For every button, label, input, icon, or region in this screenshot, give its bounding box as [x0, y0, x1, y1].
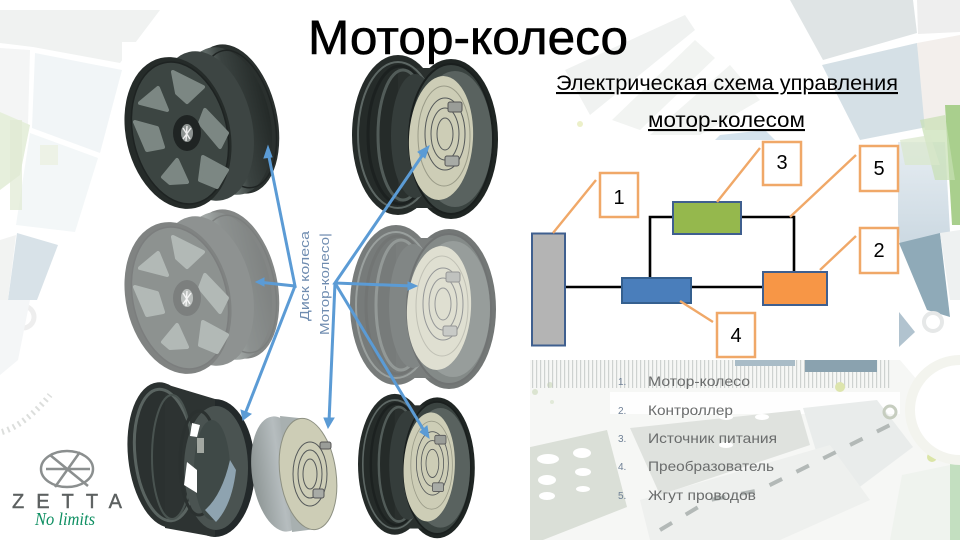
panel: white wheels area	[122, 42, 530, 540]
wheel: motor wheel transparent	[350, 225, 496, 389]
legend list: Источник питания	[648, 430, 777, 446]
wheel: motor wheel bottom right	[358, 394, 475, 538]
heading: circuit diagram: мотор-колесом	[648, 109, 805, 132]
heading: circuit diagram	[556, 72, 898, 132]
vertical label: disc: Диск колеса	[297, 230, 312, 321]
vertical label: motor wheel: Мотор-колесо|	[317, 233, 332, 335]
legend list: 4.	[618, 462, 626, 473]
legend list: Жгут проводов	[648, 487, 756, 503]
callout 2	[860, 228, 898, 273]
legend list: 1.	[618, 377, 626, 388]
legend list	[618, 373, 777, 503]
circuit wires	[565, 217, 794, 287]
callout 3: 3	[776, 152, 788, 174]
title: Мотор-колесо	[308, 12, 628, 65]
callout 1	[600, 173, 638, 217]
logo: ZETTA emblem	[41, 451, 93, 487]
wheel: alloy disc dark	[110, 35, 293, 220]
arrows: disc callouts	[241, 146, 295, 420]
callout 5: 5	[873, 158, 885, 180]
heading: circuit diagram: Электрическая схема управления	[556, 72, 898, 95]
block: power source	[673, 202, 741, 234]
wheel: hollow rim bottom	[121, 379, 255, 537]
logo: tagline: No limits	[34, 509, 95, 529]
legend list: Преобразователь	[648, 458, 774, 474]
panel: white circuit area	[530, 140, 898, 360]
legend list: Контроллер	[648, 402, 733, 418]
legend list: 2.	[618, 406, 626, 417]
wheel: assembled motor wheel	[352, 55, 498, 219]
circuit diagram	[532, 142, 898, 357]
callout 4: 4	[730, 325, 742, 347]
wheel: motor unit	[244, 413, 344, 535]
block: motor wheel	[532, 234, 565, 346]
legend list: 5.	[618, 491, 626, 502]
callout 4	[717, 313, 755, 357]
callout 5	[860, 146, 898, 191]
callout 2: 2	[873, 240, 885, 262]
callout 3	[763, 142, 801, 185]
callout 1: 1	[613, 187, 625, 209]
block: controller	[763, 272, 827, 305]
logo: ZETTA wordmark: ZETTA	[12, 491, 123, 513]
leader lines	[553, 148, 856, 322]
legend list: Мотор-колесо	[648, 373, 750, 389]
block: converter	[622, 278, 691, 303]
wheel: alloy disc transparent	[110, 200, 293, 385]
arrows: motor wheel callouts	[324, 146, 429, 438]
legend list: 3.	[618, 434, 626, 445]
